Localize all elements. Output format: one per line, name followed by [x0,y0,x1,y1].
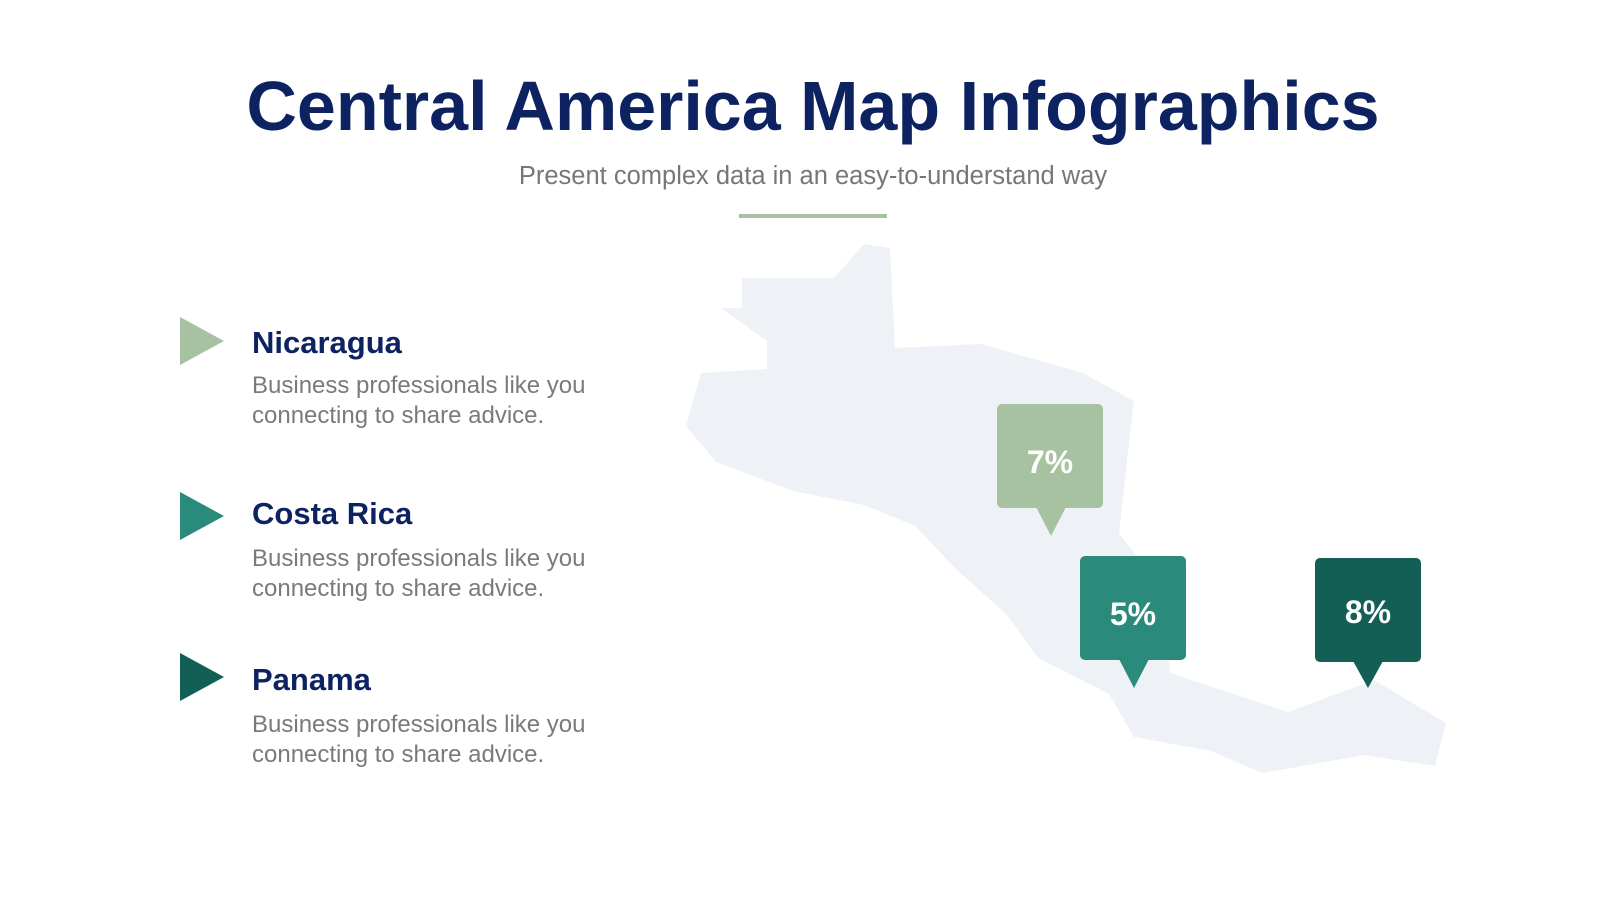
icon: triangle dark green [180,653,224,701]
callout 7%: 7% [1027,444,1073,480]
text: Business professionals like you [252,711,586,738]
callout 7% [997,404,1103,536]
text: connecting to share advice. [252,741,544,768]
callout 5% [1080,556,1186,688]
callout 5%: 5% [1110,596,1156,632]
item: Nicaragua [180,317,586,429]
heading: Panama [252,662,371,697]
text: Business professionals like you [252,372,586,399]
item: Panama [180,653,586,768]
divider [739,214,887,218]
heading: Costa Rica [252,496,412,531]
text: Business professionals like you [252,545,586,572]
text [252,711,586,768]
text [252,545,586,602]
icon: triangle teal [180,492,224,540]
text: connecting to share advice. [252,575,544,602]
icon: triangle light green [180,317,224,365]
heading: Nicaragua [252,325,402,360]
text [252,372,586,429]
text: connecting to share advice. [252,402,544,429]
callout 8% [1315,558,1421,688]
item: Costa Rica [180,492,586,602]
callout 8%: 8% [1345,594,1391,630]
subtitle: Present complex data in an easy-to-understand way [519,162,1107,190]
title: Central America Map Infographics [246,67,1380,145]
